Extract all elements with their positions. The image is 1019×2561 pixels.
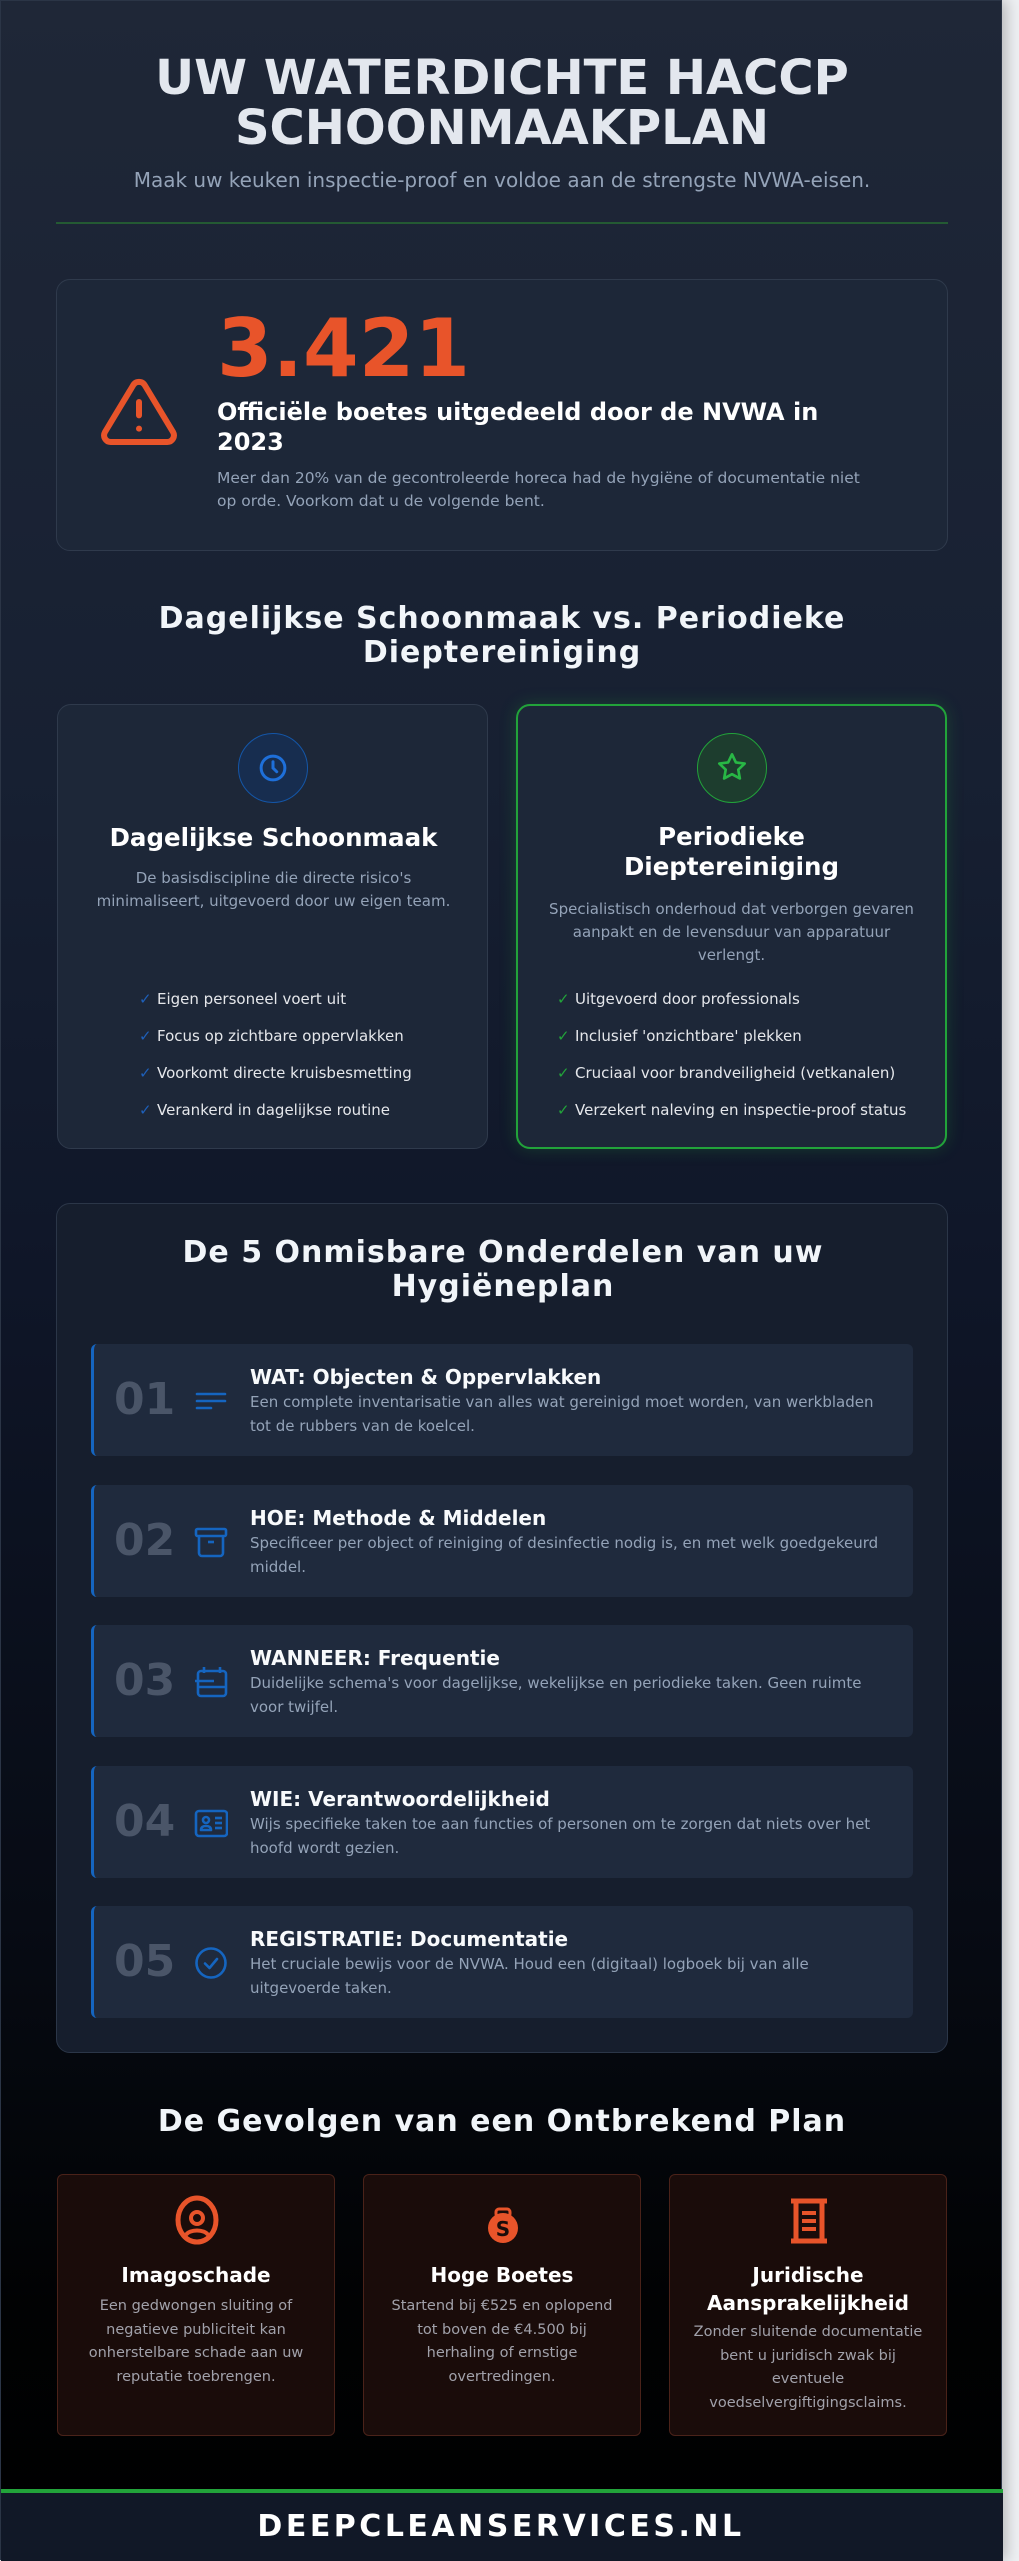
card: juridische aansprakelijkheid (669, 2174, 947, 2436)
icon: reputation (176, 2196, 218, 2244)
checklist: Focus op zichtbare oppervlakken (157, 1027, 404, 1045)
checklist: Eigen personeel voert uit (157, 990, 346, 1008)
stat description: Meer dan 20% van de gecontroleerde horeca had de hygiëne of documentatie niet (217, 469, 860, 487)
item 05: 05 (114, 1936, 175, 1987)
item 04 (91, 1766, 913, 1878)
card: imagoschade: Een gedwongen sluiting of negatieve publiciteit kan onherstelbare schade aan uw reputatie toebrengen. (89, 2298, 303, 2384)
checklist: ✓ (139, 1064, 152, 1082)
heading: comparison: Dieptereiniging (363, 635, 641, 670)
card title: Dagelijkse Schoonmaak (110, 823, 437, 852)
stat label: Officiële boetes uitgedeeld door de NVWA in 2023 (217, 398, 818, 456)
icon: star (697, 733, 767, 803)
checklist: ✓ (557, 1101, 570, 1119)
card description: Specialistisch onderhoud dat verborgen gevaren aanpakt en de levensduur van apparatuur verlengt. (549, 900, 914, 964)
item 02: 02 (114, 1515, 175, 1566)
item 01: Een complete inventarisatie van alles wat gereinigd moet worden, van werkbladen tot de rubbers van de koelcel. (250, 1393, 873, 1435)
item 01: 01 (114, 1374, 175, 1425)
heading: components: De 5 Onmisbare Onderdelen van uw (182, 1235, 823, 1270)
item 03: Duidelijke schema's voor dagelijkse, wekelijkse en periodieke taken. Geen ruimte voor twijfel. (250, 1674, 861, 1716)
heading: components: Hygiëneplan (392, 1269, 614, 1304)
item 02 (91, 1485, 913, 1597)
checklist: ✓ (139, 1101, 152, 1119)
card title: Dieptereiniging (624, 852, 839, 881)
item 03 (91, 1625, 913, 1737)
card: juridische aansprakelijkheid: Zonder sluitende documentatie bent u juridisch zwak bij eventuele voedselvergiftigingsclaims. (694, 2324, 922, 2410)
checklist: Verankerd in dagelijkse routine (157, 1101, 390, 1119)
stat description: op orde. Voorkom dat u de volgende bent. (217, 492, 545, 510)
panel: stat card (56, 279, 948, 551)
title (155, 50, 849, 156)
card: imagoschade: Imagoschade (121, 2263, 271, 2287)
checklist (557, 990, 906, 1119)
card title (624, 822, 839, 881)
item 02: Specificeer per object of reiniging of desinfectie nodig is, en met welk goedgekeurd middel. (250, 1534, 878, 1576)
icon: document (791, 2198, 827, 2244)
title: SCHOONMAAKPLAN (235, 100, 769, 156)
icon: archive box (194, 1528, 228, 1558)
icon: list (196, 1392, 226, 1410)
item 01 (91, 1344, 913, 1456)
icon: id card (194, 1810, 228, 1838)
checklist (139, 990, 412, 1119)
checklist: Voorkomt directe kruisbesmetting (157, 1064, 412, 1082)
panel: periodic deep cleaning (516, 704, 947, 1149)
item 02: HOE: Methode & Middelen (250, 1506, 546, 1530)
stat description (217, 469, 860, 510)
footer (1, 2489, 1003, 2561)
checklist: Verzekert naleving en inspectie-proof status (575, 1101, 906, 1119)
footer brand: DEEPCLEANSERVICES.NL (257, 2509, 745, 2544)
icon: warning (101, 378, 177, 445)
icon: money bag: S (496, 2217, 510, 2241)
card: imagoschade (57, 2174, 335, 2436)
item 01: WAT: Objecten & Oppervlakken (250, 1365, 601, 1389)
card: hoge boetes: Hoge Boetes (431, 2263, 573, 2287)
item 03: WANNEER: Frequentie (250, 1646, 500, 1670)
heading: comparison (159, 601, 845, 670)
item 04: WIE: Verantwoordelijkheid (250, 1787, 550, 1811)
icon: money bag (488, 2208, 518, 2243)
checklist: ✓ (557, 1027, 570, 1045)
item 04: 04 (114, 1796, 175, 1847)
subtitle: Maak uw keuken inspectie-proof en voldoe aan de strengste NVWA-eisen. (134, 168, 870, 192)
checklist: ✓ (139, 990, 152, 1008)
icon: clock (238, 733, 308, 803)
heading: components (182, 1235, 823, 1304)
heading: comparison: Dagelijkse Schoonmaak vs. Periodieke (159, 601, 845, 636)
icon: check circle (195, 1947, 227, 1979)
item 05: REGISTRATIE: Documentatie (250, 1927, 568, 1951)
card: juridische aansprakelijkheid: Juridische (752, 2263, 864, 2287)
title: UW WATERDICHTE HACCP (155, 50, 849, 106)
panel: daily cleaning (57, 704, 488, 1149)
item 03: 03 (114, 1655, 175, 1706)
icon: calendar (195, 1667, 228, 1698)
panel: 5 components (56, 1203, 948, 2053)
checklist: ✓ (557, 1064, 570, 1082)
checklist: ✓ (139, 1027, 152, 1045)
item 05 (91, 1906, 913, 2018)
card: hoge boetes: Startend bij €525 en oplopend tot boven de €4.500 bij herhaling of ernstige overtredingen. (392, 2298, 612, 2384)
item 05: Het cruciale bewijs voor de NVWA. Houd een (digitaal) logboek bij van alle uitgevoerde taken. (250, 1955, 809, 1997)
item 04: Wijs specifieke taken toe aan functies of personen om te zorgen dat niets over het hoofd wordt gezien. (250, 1815, 870, 1857)
checklist: Inclusief 'onzichtbare' plekken (575, 1027, 802, 1045)
heading: consequences: De Gevolgen van een Ontbrekend Plan (158, 2104, 846, 2139)
stat number: 3.421 (217, 302, 470, 395)
card description: De basisdiscipline die directe risico's minimaliseert, uitgevoerd door uw eigen team. (97, 869, 450, 910)
checklist: Cruciaal voor brandveiligheid (vetkanalen) (575, 1064, 895, 1082)
checklist: Uitgevoerd door professionals (575, 990, 800, 1008)
card: hoge boetes (363, 2174, 641, 2436)
card: juridische aansprakelijkheid: Aansprakelijkheid (707, 2291, 909, 2315)
card title: Periodieke (658, 822, 805, 851)
checklist: ✓ (557, 990, 570, 1008)
